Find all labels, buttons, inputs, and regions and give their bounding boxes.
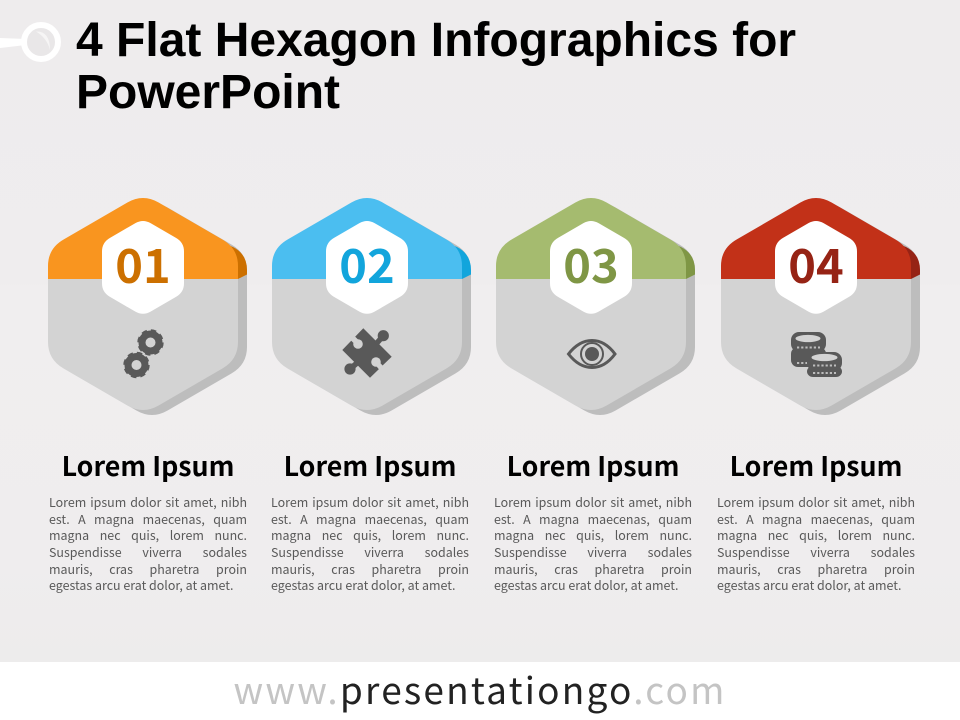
column 4 text: est. A magna maecenas, quam: [717, 510, 915, 528]
hexagon 01: 01: [115, 228, 171, 297]
hexagon 02: 02: [339, 228, 395, 297]
column 2 text: magna nec quis, lorem nunc.: [271, 526, 469, 544]
icon: coins: [791, 332, 842, 377]
column 4 text: egestas arcu erat dolor, at amet.: [717, 576, 901, 594]
column 2 text: Lorem ipsum dolor sit amet, nibh: [271, 493, 469, 511]
column 1 text: Lorem ipsum dolor sit amet, nibh: [49, 493, 247, 511]
column 3 text: mauris, cras pharetra proin: [494, 560, 692, 578]
column 3 text: Lorem ipsum dolor sit amet, nibh: [494, 493, 692, 511]
column 1 text: magna nec quis, lorem nunc.: [49, 526, 247, 544]
title: 4 Flat Hexagon Infographics for: [76, 14, 796, 67]
hexagon 04: [721, 198, 920, 415]
column 2 text: Suspendisse viverra sodales: [271, 543, 469, 561]
column 1 text: [49, 445, 247, 594]
column 4 text: Lorem ipsum dolor sit amet, nibh: [717, 493, 915, 511]
title: [76, 14, 796, 119]
hexagon 03: [496, 198, 695, 415]
column 3 text: [494, 445, 692, 594]
title: PowerPoint: [76, 66, 340, 119]
icon: ring pin: [0, 25, 58, 59]
column 2 text: est. A magna maecenas, quam: [271, 510, 469, 528]
footer: www.presentationgo.com: [233, 661, 727, 715]
icon: eye: [568, 340, 615, 368]
column 1 text: egestas arcu erat dolor, at amet.: [49, 576, 233, 594]
column 4 text: magna nec quis, lorem nunc.: [717, 526, 915, 544]
hexagon 01: [48, 198, 247, 415]
column 2 text: [271, 445, 469, 594]
column 1 text: Lorem Ipsum: [62, 445, 234, 484]
column 2 text: mauris, cras pharetra proin: [271, 560, 469, 578]
column 1 text: Suspendisse viverra sodales: [49, 543, 247, 561]
icon: gears: [125, 331, 162, 376]
icon: puzzle piece: [342, 328, 392, 378]
column 4 text: [717, 445, 915, 594]
column 1 text: est. A magna maecenas, quam: [49, 510, 247, 528]
column 3 text: Suspendisse viverra sodales: [494, 543, 692, 561]
column 1 text: mauris, cras pharetra proin: [49, 560, 247, 578]
footer: [0, 662, 960, 720]
column 4 text: Suspendisse viverra sodales: [717, 543, 915, 561]
column 2 text: egestas arcu erat dolor, at amet.: [271, 576, 455, 594]
column 3 text: magna nec quis, lorem nunc.: [494, 526, 692, 544]
hexagon 03: 03: [563, 228, 619, 297]
hexagon 04: 04: [788, 228, 844, 297]
column 3 text: Lorem Ipsum: [507, 445, 679, 484]
hexagon 02: [272, 198, 471, 415]
column 2 text: Lorem Ipsum: [284, 445, 456, 484]
column 3 text: egestas arcu erat dolor, at amet.: [494, 576, 678, 594]
column 4 text: Lorem Ipsum: [730, 445, 902, 484]
column 4 text: mauris, cras pharetra proin: [717, 560, 915, 578]
column 3 text: est. A magna maecenas, quam: [494, 510, 692, 528]
